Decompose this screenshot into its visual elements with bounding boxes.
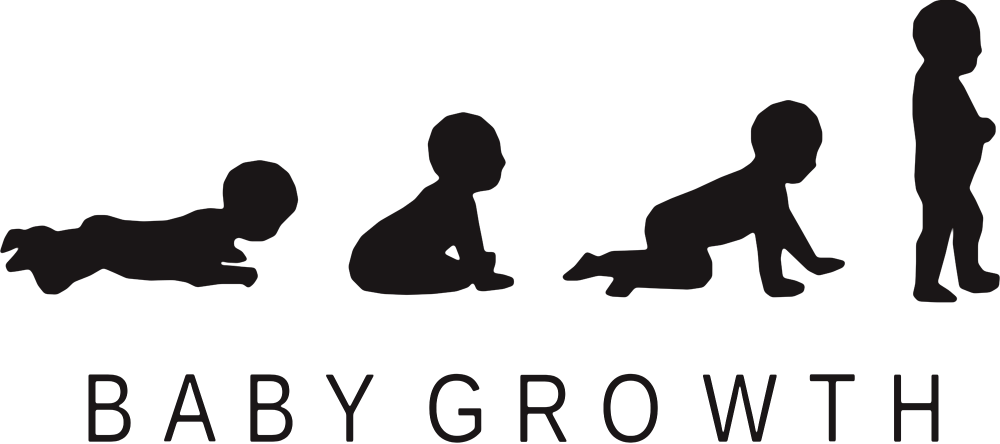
icon: baby lying on tummy xyxy=(0,161,298,294)
baby silhouettes xyxy=(0,0,999,302)
icon: baby sitting xyxy=(349,113,513,294)
icon: baby crawling xyxy=(562,100,845,297)
icon: toddler standing xyxy=(913,0,999,302)
